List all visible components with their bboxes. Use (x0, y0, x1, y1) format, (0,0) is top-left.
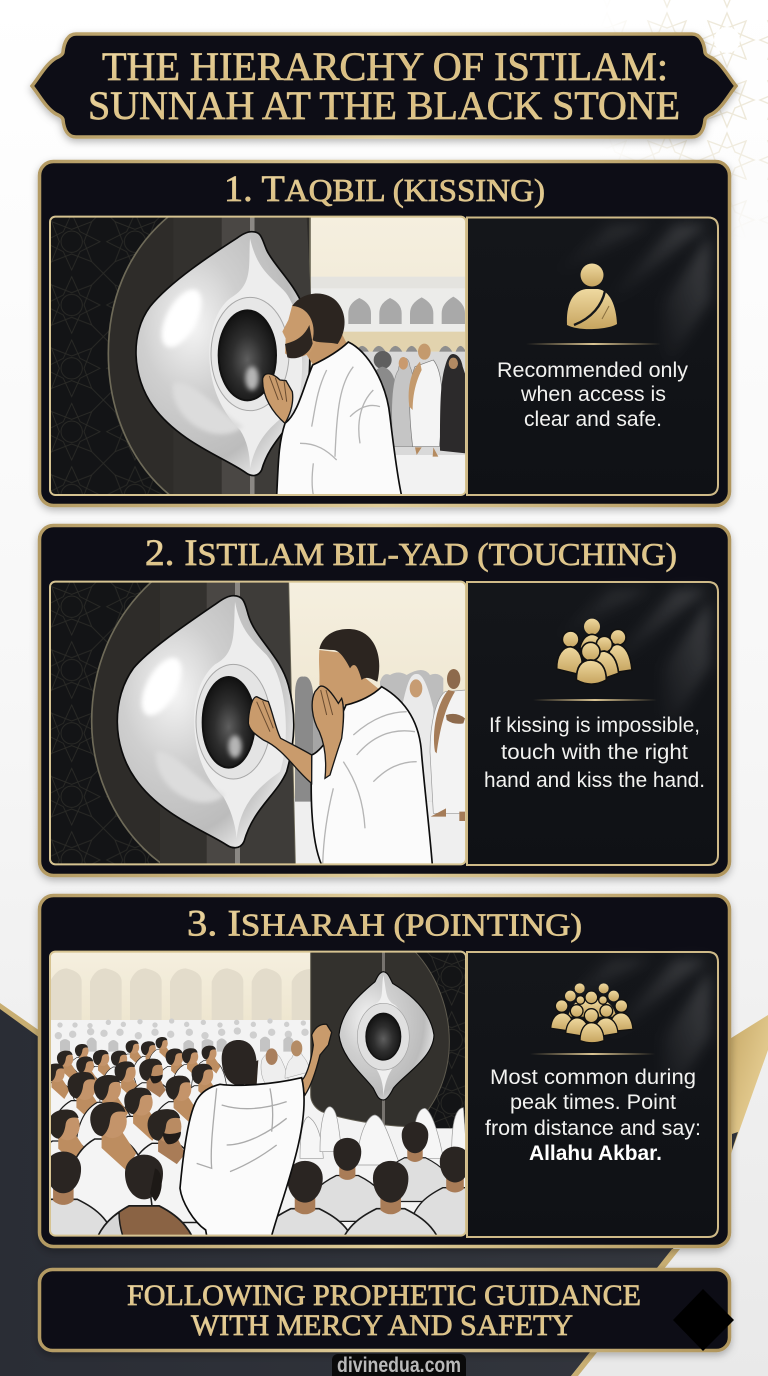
decorative geometric pattern top right (600, 0, 768, 240)
info box 2 (467, 582, 718, 865)
pilgrim touching the stone (248, 629, 432, 865)
text 3: peak times. Point (510, 1090, 676, 1114)
text 1 (497, 358, 688, 431)
illustration: kissing the Black Stone (50, 217, 467, 497)
Kaaba wall with silver frame (108, 217, 311, 497)
footer banner (40, 1270, 730, 1350)
title banner (32, 34, 736, 137)
text 2: hand and kiss the hand. (484, 768, 705, 792)
footer text: WITH MERCY AND SAFETY (191, 1309, 573, 1342)
panel 3: Isharah (7, 896, 729, 1268)
icon: small group (557, 619, 632, 684)
illustration: touching the Black Stone (50, 582, 467, 865)
info box 3 (467, 952, 718, 1237)
icon: pilgrim (567, 264, 617, 329)
light rays (540, 224, 710, 390)
text 1: Recommended only (497, 358, 688, 382)
light rays (540, 959, 710, 1125)
text 2: touch with the right (501, 740, 688, 764)
text 1: when access is (520, 382, 666, 406)
background crowd (295, 669, 466, 821)
light rays (540, 589, 710, 755)
heading 3: 3. ISHARAH (POINTING) (187, 904, 582, 944)
Kaaba wall with silver frame (92, 582, 295, 865)
panel 2: Istilam bil-yad (40, 526, 730, 876)
footer text (127, 1279, 641, 1342)
crowd of pilgrims (7, 1037, 503, 1268)
Kaaba wall with silver frame (311, 952, 467, 1128)
white-robed foreground crowd (300, 1107, 467, 1165)
text 2: If kissing is impossible, (489, 713, 700, 737)
black diamond mark (673, 1289, 734, 1351)
info box 1 (467, 218, 718, 495)
text 1: clear and safe. (524, 407, 662, 431)
title text (88, 44, 680, 128)
title text: SUNNAH AT THE BLACK STONE (88, 83, 680, 128)
panel 1: Taqbil (40, 162, 730, 506)
illustration: pointing from a distance (49, 950, 466, 1237)
background wedge: dark navy corner (0, 1003, 680, 1376)
title text: THE HIERARCHY OF ISTILAM: (102, 44, 668, 89)
icon: large crowd (551, 983, 633, 1043)
heading 1: 1. TAQBIL (KISSING) (224, 169, 545, 210)
text 3: from distance and say: (485, 1116, 701, 1140)
text 3: Allahu Akbar. (529, 1141, 662, 1165)
text 3 (485, 1065, 701, 1165)
background wedge: gold right (728, 1015, 768, 1154)
background pilgrims (370, 344, 466, 457)
pilgrim kissing the stone (263, 294, 402, 496)
text 2 (484, 713, 705, 792)
heading 2: 2. ISTILAM BIL-YAD (TOUCHING) (145, 533, 677, 574)
footer text: FOLLOWING PROPHETIC GUIDANCE (127, 1279, 641, 1312)
main pilgrim pointing (180, 1024, 332, 1236)
distant crowd (55, 1018, 309, 1052)
text 3: Most common during (490, 1065, 696, 1089)
